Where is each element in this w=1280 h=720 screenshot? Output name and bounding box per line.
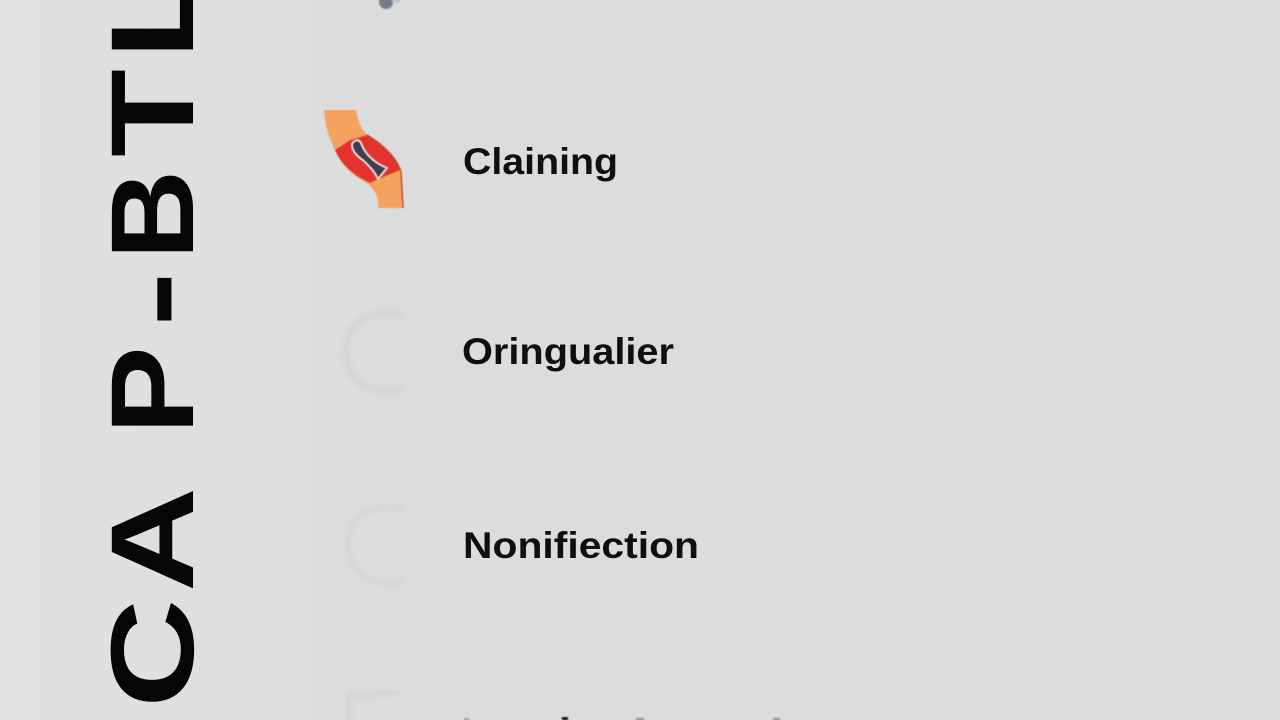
- row: Oringualier: [346, 313, 674, 391]
- icon: faint corner: [349, 693, 400, 720]
- vertical title: CA P-BTL: C: [86, 599, 218, 708]
- row: Claining: [324, 110, 618, 208]
- label: Nonifiection: Nonifiection: [463, 525, 699, 566]
- label: Claining: Claining: [463, 141, 618, 182]
- cut-off label tops: [464, 717, 780, 720]
- icon: cut-off grey marker at top: [379, 0, 400, 9]
- vertical title: CA P-BTL: T: [86, 69, 218, 157]
- icon: faint ring: [348, 507, 406, 583]
- vertical title: CA P-BTL: [86, 0, 220, 708]
- icon: faint ring: [346, 313, 404, 391]
- label: Oringualier: Oringualier: [462, 331, 674, 372]
- vertical title: CA P-BTL: A: [87, 487, 219, 592]
- vertical title: CA P-BTL: -: [88, 271, 220, 327]
- row: Nonifiection: [348, 507, 699, 583]
- vertical title: CA P-BTL: P: [87, 346, 218, 434]
- vertical title: CA P-BTL: B: [86, 170, 218, 260]
- row: cut-off bottom item: [349, 693, 780, 720]
- icon: artery with clot: [324, 110, 403, 208]
